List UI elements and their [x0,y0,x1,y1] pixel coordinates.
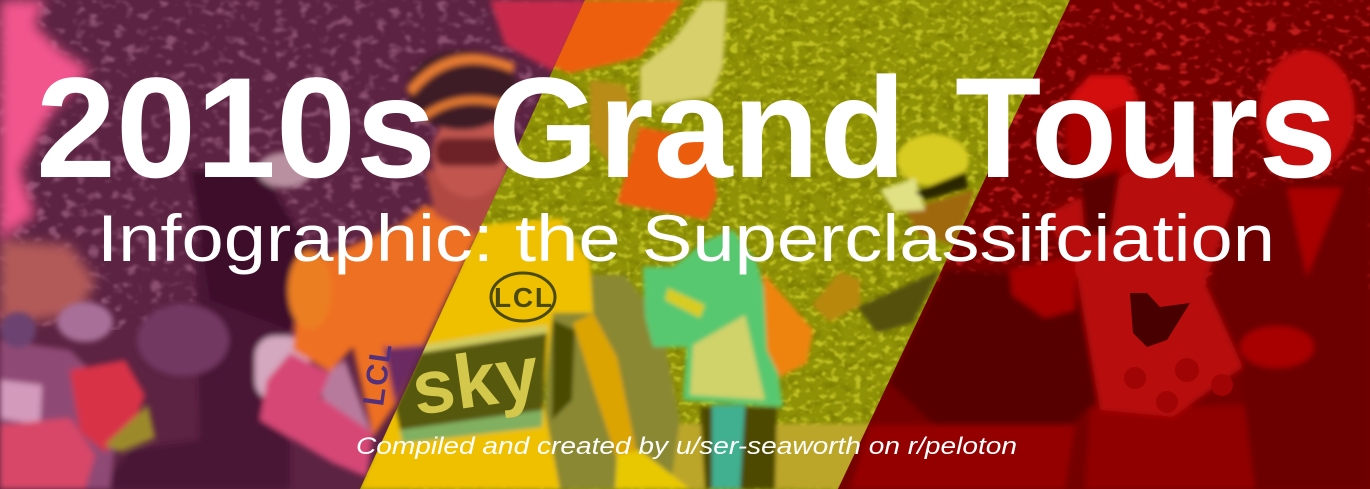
white jacket [255,336,310,401]
jersey logo: sky: sky [407,330,544,432]
blurred grey glove [137,304,229,376]
subtitle: Infographic: the Superclassifciation [97,201,1275,275]
right man jacket [1205,165,1370,489]
rider helmet [407,50,517,130]
helmet [57,302,113,342]
title [36,49,1337,208]
title: 2010s [36,49,436,208]
flag in pink panel [490,0,590,72]
barrier [655,424,880,489]
panel: red tinted photo [830,0,1370,489]
camera man [190,170,320,330]
yellow jersey [360,218,593,489]
icon: carrefour logo [1130,293,1190,347]
jersey logo: LCL [491,273,555,321]
left man [890,270,1097,430]
yellow cap spectator [857,270,940,333]
rider pink arm [260,353,373,477]
backpack [763,273,813,377]
hands [1240,326,1314,368]
gloved red hand [70,360,145,452]
trousers [1085,405,1262,489]
lower left crowd [0,340,120,489]
title: Tours [955,49,1337,208]
panel: pink tinted photo [0,0,600,489]
grey spectator [545,275,680,489]
rider neck and face [425,170,510,240]
title: Grand [488,49,906,208]
jersey logo: LCL: LCL [494,282,552,313]
flags [540,0,683,73]
jersey polka dots [1124,358,1233,413]
sky panel [395,333,547,430]
orange jersey sponsor: LCL [357,342,399,408]
rider orange jersey [293,205,480,437]
green jersey rider [643,230,783,407]
panel: yellow tinted photo [350,0,1080,489]
credit: Compiled and created by u/ser-seaworth on r/peloton [356,433,1017,460]
polka jersey [1045,150,1243,417]
